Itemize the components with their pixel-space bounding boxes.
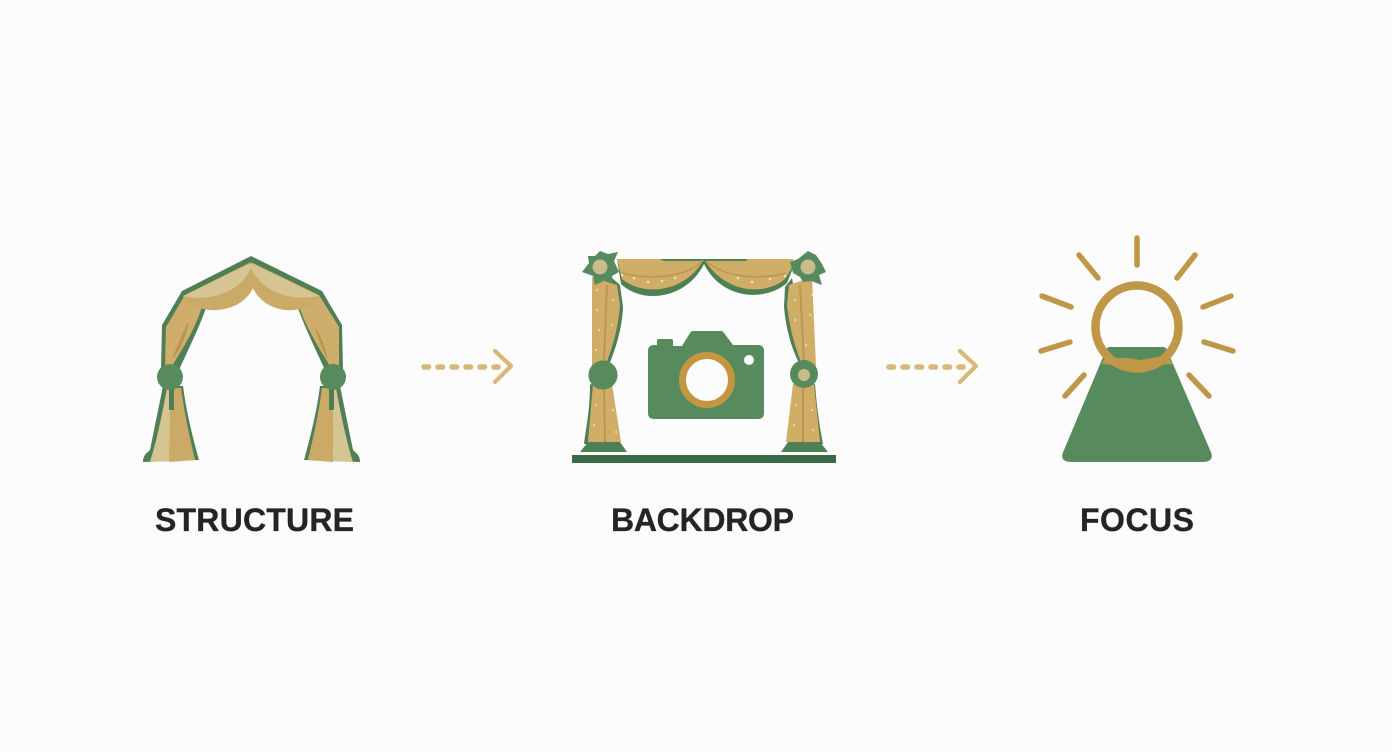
flower mid left bbox=[589, 361, 617, 389]
flower mid right bbox=[790, 360, 818, 388]
icon: backdrop with camera bbox=[572, 251, 836, 463]
right lower drape bbox=[304, 386, 360, 462]
label: focus: FOCUS bbox=[1080, 502, 1194, 538]
gold ring bbox=[1096, 286, 1178, 368]
right post drape bbox=[781, 277, 828, 452]
floor bar bbox=[572, 455, 836, 463]
arrow: backdrop to focus bbox=[889, 351, 976, 382]
icon: spotlight focus bbox=[1041, 238, 1233, 462]
arrow: structure to backdrop bbox=[424, 351, 511, 382]
left post drape bbox=[580, 277, 627, 452]
icon: draped arch structure bbox=[143, 256, 360, 462]
light rays bbox=[1041, 238, 1233, 396]
flower top right bbox=[790, 251, 826, 285]
flower top left bbox=[582, 251, 619, 285]
label: structure: STRUCTURE bbox=[155, 502, 354, 538]
right tie-back bbox=[320, 364, 346, 390]
left tie-back bbox=[157, 364, 183, 390]
top swags bbox=[617, 259, 793, 296]
label: backdrop: BACKDROP bbox=[611, 502, 794, 538]
green pedestal bbox=[1062, 347, 1212, 462]
camera bbox=[648, 331, 764, 419]
left lower drape bbox=[143, 386, 199, 462]
